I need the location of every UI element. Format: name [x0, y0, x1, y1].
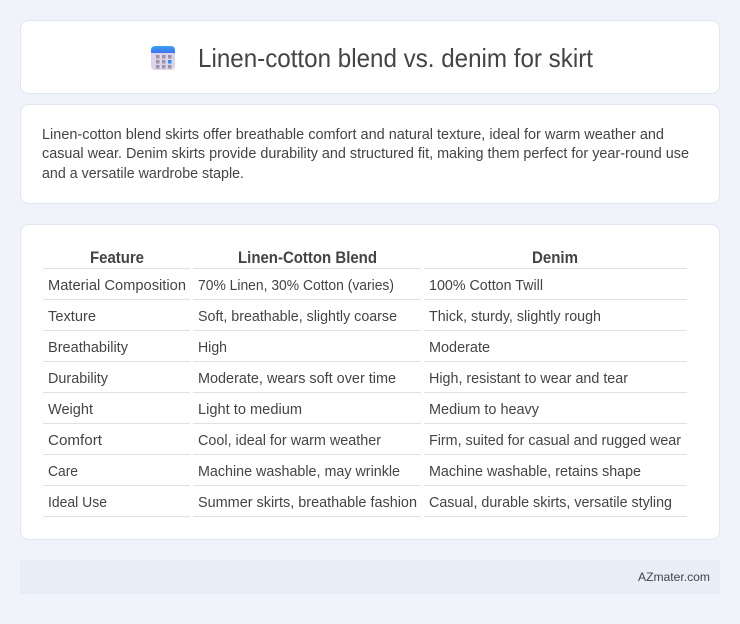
row: Care: Machine washable, may wrinkle	[198, 464, 400, 480]
row: Weight	[48, 402, 540, 418]
text: description paragraph: Linen-cotton blend skirts offer breathable comfort and natural texture, ideal for warm weather and	[42, 127, 664, 143]
row: Texture: Soft, breathable, slightly coarse	[198, 309, 397, 325]
row: Weight: Medium to heavy	[429, 402, 540, 418]
panel: description	[20, 104, 720, 204]
title: Linen-cotton blend vs. denim for skirt	[198, 45, 593, 73]
text: description paragraph: and a versatile wardrobe staple.	[42, 166, 244, 182]
row: Material Composition: Material Composition	[48, 278, 186, 294]
row: Material Composition: 100% Cotton Twill	[429, 278, 543, 294]
panel: header	[20, 20, 720, 94]
footer	[20, 560, 720, 594]
row: Care: Machine washable, retains shape	[429, 464, 641, 480]
row: Breathability: High	[198, 340, 227, 356]
row: Comfort: Comfort	[48, 433, 102, 449]
text: description paragraph: casual wear. Denim skirts provide durability and structured fit, making them perfect for year-round use	[42, 146, 689, 162]
row: Weight: Weight	[48, 402, 93, 418]
row: Texture: Texture	[48, 309, 96, 325]
panel: comparison table	[20, 224, 720, 540]
row: Ideal Use	[48, 495, 672, 511]
row: Texture	[48, 309, 601, 325]
row: Material Composition: 70% Linen, 30% Cotton (varies)	[198, 278, 394, 294]
table header	[90, 249, 578, 267]
row: Care	[48, 464, 641, 480]
row: Material Composition	[48, 278, 543, 294]
row: Comfort	[48, 433, 681, 449]
table header: Denim	[532, 249, 578, 267]
text: description paragraph	[42, 127, 689, 182]
row: Comfort: Firm, suited for casual and rugged wear	[429, 433, 681, 449]
row: Ideal Use: Casual, durable skirts, versatile styling	[429, 495, 672, 511]
row: Breathability	[48, 340, 490, 356]
row: Breathability: Breathability	[48, 340, 129, 356]
footer text: AZmater.com	[638, 570, 710, 584]
row: Comfort: Cool, ideal for warm weather	[198, 433, 381, 449]
row: Weight: Light to medium	[198, 402, 302, 418]
row: Durability	[48, 371, 628, 387]
row: Durability: Durability	[48, 371, 109, 387]
icon: calendar	[151, 46, 175, 70]
row: Texture: Thick, sturdy, slightly rough	[429, 309, 601, 325]
row: Ideal Use: Summer skirts, breathable fashion	[198, 495, 417, 511]
table header: Feature	[90, 249, 144, 267]
row: Breathability: Moderate	[429, 340, 490, 356]
row: Durability: Moderate, wears soft over time	[198, 371, 396, 387]
row: Durability: High, resistant to wear and tear	[429, 371, 628, 387]
table header: Linen-Cotton Blend	[238, 249, 377, 267]
row: Care: Care	[48, 464, 78, 480]
row: Ideal Use: Ideal Use	[48, 495, 107, 511]
